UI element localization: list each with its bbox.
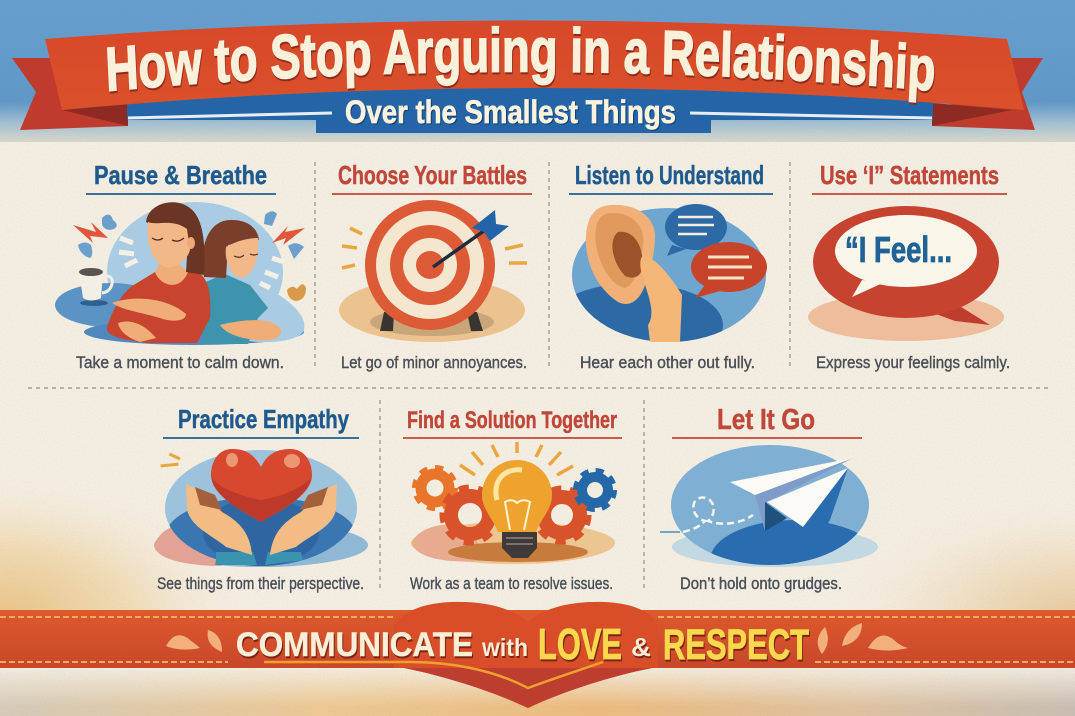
- blue speech bubble: [665, 204, 727, 256]
- right woman: [203, 220, 281, 344]
- illustration: paper plane: [660, 445, 878, 567]
- subtitle ribbon: [127, 88, 933, 133]
- illustration: I feel speech bubble: [808, 206, 1004, 341]
- bottom banner: [0, 602, 1075, 708]
- caption: Take a moment to calm down.: [76, 354, 284, 372]
- heading: Let It Go: [717, 404, 815, 436]
- caption: Hear each other out fully.: [580, 354, 755, 372]
- heading: Use ‘I” Statements: [820, 160, 999, 190]
- title banner: [12, 20, 1043, 133]
- caption: Express your feelings calmly.: [816, 354, 1010, 372]
- heading: Practice Empathy: [178, 404, 349, 434]
- cup: [79, 268, 112, 306]
- panel: listen to understand: [569, 164, 773, 372]
- illustration: target and arrow: [339, 200, 527, 342]
- panel: pause and breathe: [55, 160, 306, 372]
- closing message: COMMUNICATE: [236, 626, 473, 664]
- illustration: heart in hands: [154, 449, 368, 573]
- panel: find a solution together: [403, 407, 622, 593]
- heading: Pause & Breathe: [94, 160, 267, 190]
- illustration: two women back to back: [55, 202, 306, 345]
- closing message: RESPECT: [663, 621, 809, 669]
- illustration: ear and speech bubbles: [572, 204, 767, 342]
- panel: practice empathy: [154, 404, 368, 593]
- caption: See things from their perspective.: [157, 575, 364, 593]
- panel: use I statements: [808, 160, 1010, 372]
- leaf ornaments right: [818, 623, 908, 654]
- heading: Find a Solution Together: [407, 407, 617, 434]
- illustration: I feel speech bubble: “I Feel...: [845, 229, 952, 270]
- bulb: [482, 460, 552, 558]
- closing message: LOVE: [538, 620, 622, 669]
- red ribbon: [45, 20, 1024, 110]
- caption: Work as a team to resolve issues.: [410, 575, 613, 593]
- closing message: &: [631, 632, 651, 662]
- illustration: light bulb and gears: [411, 442, 615, 564]
- section dividers: [28, 162, 1050, 590]
- leaf ornaments left: [166, 630, 222, 652]
- heading: Listen to Understand: [575, 160, 764, 190]
- caption: Don’t hold onto grudges.: [680, 575, 842, 593]
- closing message: with: [481, 634, 528, 662]
- closing message: [236, 620, 809, 669]
- heading: Choose Your Battles: [338, 160, 527, 190]
- banner tails: [12, 58, 1043, 130]
- heart: [394, 602, 658, 708]
- caption: Let go of minor annoyances.: [341, 354, 527, 372]
- left woman: [107, 202, 210, 343]
- title: How to Stop Arguing in a Relationship: [107, 26, 935, 105]
- gears: [415, 468, 614, 542]
- red speech bubble: [691, 242, 767, 298]
- panel: choose your battles: [332, 160, 532, 372]
- subtitle: Over the Smallest Things: [345, 94, 676, 130]
- panel: let it go: [660, 404, 880, 600]
